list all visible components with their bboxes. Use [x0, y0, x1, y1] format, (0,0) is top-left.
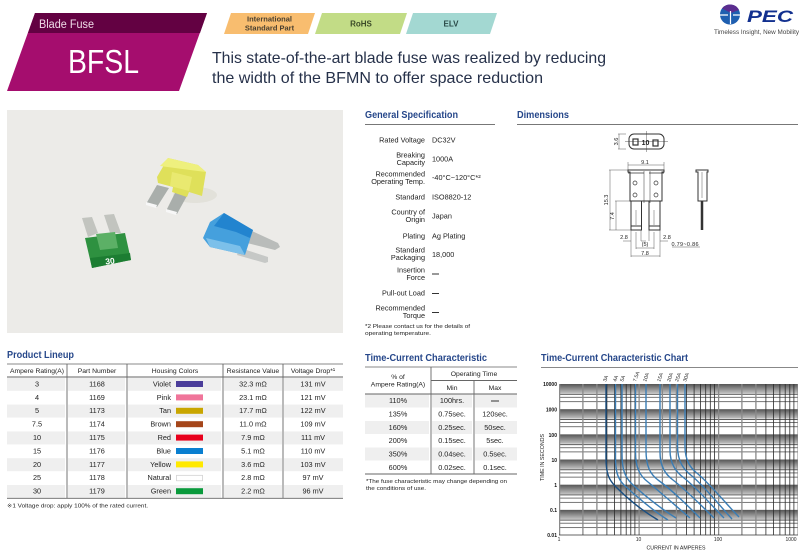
general specification list: Breaking [396, 150, 425, 160]
dimensions drawing: 9.1 [641, 160, 649, 166]
time-current table: 0.25sec. [438, 423, 466, 432]
product lineup table: 1178 [89, 473, 105, 482]
general specification list: Torque [403, 311, 425, 320]
tag: International Standard Part [224, 13, 315, 34]
product lineup table: Violet [153, 379, 171, 388]
product lineup table: 1168 [89, 379, 105, 388]
product lineup table: 110 mV [301, 446, 325, 455]
time-current table: 160% [389, 423, 408, 432]
tag: ELV: ELV [444, 20, 459, 28]
product lineup table: Pink [157, 393, 171, 402]
product lineup table: 4 [35, 393, 39, 402]
time-current table: 0.75sec. [438, 409, 466, 418]
product lineup table: 1175 [89, 433, 105, 442]
time-current table: 0.5sec. [483, 449, 507, 458]
section heading: Time-Current Characteristic Chart: Time-Current Characteristic Chart [541, 352, 688, 364]
product lineup table: 25 [33, 473, 41, 482]
product lineup table: 15 [33, 446, 41, 455]
time-current chart: 0.1 [550, 508, 557, 514]
header badge: product name: Blade Fuse [39, 19, 94, 31]
general specification list: Plating [403, 232, 425, 240]
general specification list: Packaging [391, 253, 425, 262]
time-current footnote: the conditions of use. [366, 486, 426, 492]
time-current chart: 3A [602, 374, 610, 383]
product lineup table: 3 [35, 379, 39, 388]
product lineup footnote: ※1 Voltage drop: apply 100% of the rated current. [7, 502, 148, 510]
time-current chart: 4A [612, 374, 620, 383]
general specification list: Insertion [397, 266, 425, 274]
dimensions drawing: 3.6 [614, 138, 620, 145]
time-current table: 110% [389, 396, 408, 405]
product lineup table: 5 [35, 406, 39, 415]
dimensions drawing [604, 131, 708, 257]
general specification list: Capacity [397, 158, 425, 167]
general specification list: Force [406, 273, 425, 282]
general specification list: Pull-out Load [382, 288, 425, 298]
time-current table: Min [447, 385, 458, 392]
general specification list: ISO8820-12 [432, 192, 471, 202]
time-current chart: 10 [551, 458, 557, 464]
header badge: product name [7, 13, 207, 91]
product lineup table: Part Number [78, 368, 117, 375]
time-current table: 0.02sec. [438, 463, 466, 472]
time-current chart: 1000 [785, 537, 797, 543]
product lineup table: 131 mV [300, 379, 326, 388]
general specification list: *2 Please contact us for the details of [365, 324, 470, 330]
product lineup table: Yellow [150, 460, 172, 469]
product photo with three fuses: 30 [105, 256, 115, 266]
general specification list: Rated Voltage [379, 136, 425, 144]
product lineup table: 97 mV [302, 473, 324, 482]
product photo with three fuses [7, 110, 343, 333]
dimensions drawing: 2.8 [620, 235, 628, 241]
time-current chart: 20A [666, 372, 675, 383]
tag: International Standard Part: International [247, 14, 292, 24]
dimensions drawing: 7.4 [610, 212, 616, 220]
time-current table: 0.04sec. [438, 449, 466, 458]
time-current table: 200% [389, 436, 408, 445]
time-current table: Operating Time [451, 371, 497, 378]
product lineup table: 30 [33, 487, 41, 496]
product lineup table: 10 [33, 433, 41, 442]
time-current footnote [366, 479, 507, 492]
time-current table: 5sec. [486, 436, 504, 445]
product lineup table: 109 mV [300, 420, 326, 429]
product lineup table: 5.1 mΩ [241, 446, 265, 455]
product lineup table: 1173 [89, 406, 105, 415]
time-current table: 600% [389, 463, 408, 472]
dimensions drawing: 15.3 [604, 195, 610, 205]
tag: International Standard Part: Standard Part [245, 24, 295, 32]
product lineup table: 1177 [89, 460, 105, 469]
product lineup table: 1174 [89, 420, 105, 429]
time-current chart: 10000 [543, 382, 557, 388]
section heading: General Specification [365, 109, 495, 125]
general specification list: operating temperature. [365, 331, 431, 337]
dimensions drawing: (5) [642, 242, 649, 248]
product lineup table: Voltage Drop*¹ [291, 368, 336, 375]
product lineup table: 122 mV [300, 406, 326, 415]
general specification list: Recommended [376, 304, 425, 312]
time-current table: Ampere Rating(A) [371, 382, 425, 388]
dimensions drawing: 10 [642, 140, 649, 147]
product lineup table: 7.5 [32, 420, 42, 429]
headline description [212, 50, 606, 87]
headline description: This state-of-the-art blade fuse was realized by reducing [212, 50, 606, 67]
dimensions drawing: 7.8 [641, 251, 649, 257]
tag: RoHS: RoHS [350, 20, 373, 28]
section heading: General Specification: General Specification [365, 109, 458, 121]
time-current table: 135% [389, 409, 408, 418]
product lineup table: Resistance Value [227, 368, 279, 375]
product lineup table: 3.6 mΩ [241, 460, 265, 469]
tag: ELV [406, 13, 497, 34]
dimensions drawing: 0.79~0.86 [672, 242, 698, 248]
product lineup table: 1179 [89, 487, 105, 496]
product lineup table: 103 mV [300, 460, 326, 469]
general specification list: Recommended [376, 170, 425, 178]
product lineup table: Red [158, 433, 171, 442]
time-current chart: TIME IN SECONDS [540, 433, 546, 481]
product lineup table: Natural [147, 473, 171, 482]
product lineup table: 96 mV [302, 487, 324, 496]
logo: PEC [714, 4, 799, 36]
product lineup table: 1176 [89, 446, 105, 455]
general specification list: 18,000 [432, 250, 454, 259]
product lineup table: Tan [159, 406, 171, 415]
product lineup table: 2.8 mΩ [241, 473, 265, 482]
time-current chart: 30A [682, 372, 691, 383]
time-current chart: 10 [636, 537, 641, 543]
time-current chart: 100 [714, 537, 722, 543]
product lineup table: 111 mV [301, 433, 325, 442]
section heading: Dimensions: Dimensions [517, 109, 569, 121]
general specification list: 1000A [432, 154, 453, 164]
general specification list: Country of [391, 208, 426, 216]
time-current chart: 0.01 [547, 533, 557, 539]
logo: PEC: PEC [747, 7, 794, 26]
product lineup table: Brown [150, 420, 171, 429]
product lineup table: Ampere Rating(A) [10, 368, 64, 375]
logo: PEC: Timeless Insight, New Mobility [714, 30, 799, 36]
product lineup table: 121 mV [300, 393, 326, 402]
product lineup table: 32.3 mΩ [239, 379, 267, 388]
time-current chart: 15A [656, 372, 665, 383]
general specification list: Standard [395, 246, 425, 254]
time-current chart: 1000 [546, 408, 557, 414]
header badge: product name: BFSL [68, 43, 139, 80]
general specification list [365, 136, 481, 337]
product lineup table: 11.0 mΩ [239, 420, 267, 429]
product lineup table: 17.7 mΩ [239, 406, 267, 415]
product lineup table: Housing Colors [152, 368, 199, 375]
time-current chart: 7.5A [632, 370, 642, 383]
section heading: Product Lineup: Product Lineup [7, 349, 74, 361]
general specification list: Ag Plating [432, 232, 465, 240]
time-current table: 120sec. [482, 409, 508, 418]
product lineup table: Green [151, 487, 171, 496]
time-current chart: 1 [554, 483, 557, 489]
general specification list: Japan [432, 212, 452, 220]
time-current chart: CURRENT IN AMPERES [646, 546, 706, 552]
time-current chart: 1 [558, 537, 561, 543]
product lineup table: 1169 [89, 393, 105, 402]
general specification list: Standard [395, 192, 425, 202]
headline description: the width of the BFMN to offer space reduction [212, 70, 543, 87]
time-current table: 100hrs. [440, 396, 464, 405]
general specification list: -40°C~120°C*² [432, 173, 481, 182]
time-current table: 0.15sec. [438, 436, 466, 445]
time-current chart: 25A [674, 372, 683, 383]
time-current table: 350% [389, 449, 408, 458]
dimensions drawing: 2.8 [663, 235, 671, 241]
time-current table: 0.1sec. [483, 463, 507, 472]
time-current chart: 100 [549, 433, 557, 439]
general specification list: DC32V [432, 136, 456, 144]
time-current table: 50sec. [484, 423, 506, 432]
time-current table [365, 367, 517, 474]
product lineup table: 7.9 mΩ [241, 433, 265, 442]
time-current table: % of [391, 374, 405, 381]
general specification list: Origin [406, 215, 425, 224]
product lineup table: 20 [33, 460, 41, 469]
time-current chart: 5A [619, 374, 627, 383]
tag: RoHS [315, 13, 407, 34]
time-current chart: 10A [642, 372, 651, 383]
time-current chart [540, 370, 798, 552]
product lineup table: 23.1 mΩ [239, 393, 267, 402]
time-current table: Max [489, 385, 502, 392]
general specification list: Operating Temp. [371, 177, 425, 186]
time-current footnote: *The fuse characteristic may change depending on [366, 479, 507, 485]
product lineup table: 2.2 mΩ [241, 487, 265, 496]
product lineup table: Blue [156, 446, 171, 455]
product lineup table [7, 364, 343, 498]
section heading: Time-Current Characteristic: Time-Current Characteristic [365, 352, 487, 364]
